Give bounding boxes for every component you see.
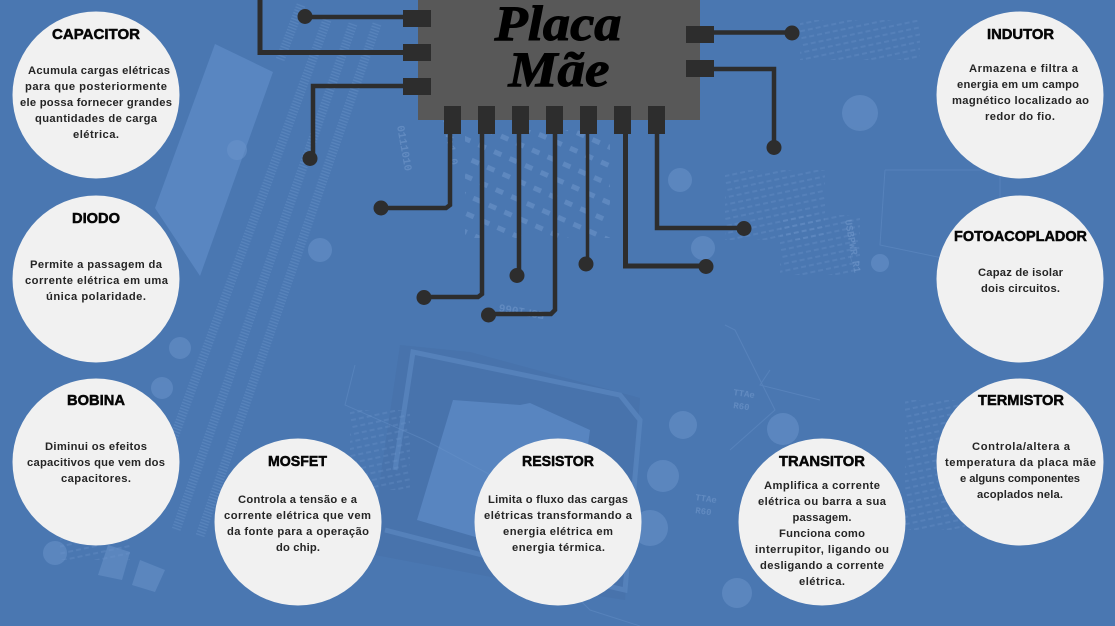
panel: resistor: energia térmica.	[512, 542, 605, 554]
chip body	[418, 0, 700, 120]
panel: transitor: desligando a corrente	[760, 560, 884, 572]
panel: indutor	[936, 12, 1104, 178]
panel: mosfet	[214, 438, 382, 606]
panel: bobina: BOBINA	[67, 392, 125, 409]
panel: termistor: temperatura da placa mãe	[945, 457, 1096, 469]
panel: indutor: redor do fio.	[985, 111, 1055, 123]
background: motherboard photo: R60	[695, 506, 712, 518]
panel: transitor: Amplifica a corrente	[764, 480, 880, 492]
panel: diodo: única polaridade.	[46, 291, 146, 303]
panel: transitor: TRANSITOR	[779, 453, 865, 470]
panel: mosfet: da fonte para a operação	[227, 526, 369, 538]
panel: capacitor: elétrica.	[73, 129, 119, 141]
panel: fotoacoplador	[936, 196, 1104, 362]
panel: transitor: Funciona como	[779, 528, 865, 540]
panel: capacitor: quantidades de carga	[35, 113, 158, 125]
background: motherboard photo: TTAe	[695, 493, 717, 506]
panel: capacitor: para que posteriormente	[25, 81, 167, 93]
panel: mosfet: MOSFET	[268, 453, 327, 470]
panel: resistor	[474, 438, 642, 606]
panel: bobina: capacitivos que vem dos	[27, 457, 165, 469]
panel: mosfet: do chip.	[276, 542, 320, 554]
panel: resistor: elétricas transformando a	[484, 510, 633, 522]
panel: mosfet: corrente elétrica que vem	[224, 510, 371, 522]
panel: termistor: Controla/altera a	[972, 441, 1071, 453]
panel: bobina: Diminui os efeitos	[45, 441, 147, 453]
title	[493, 0, 622, 97]
panel: capacitor: Acumula cargas elétricas	[28, 65, 170, 77]
panel: transitor: elétrica ou barra a sua	[758, 496, 887, 508]
panel: resistor: RESISTOR	[522, 453, 594, 470]
background: motherboard photo: ESP1066	[498, 300, 546, 320]
panel: diodo: corrente elétrica em uma	[25, 275, 169, 287]
panel: mosfet: Controla a tensão e a	[238, 494, 358, 506]
panel: indutor: energia em um campo	[957, 79, 1079, 91]
panel: indutor: magnético localizado ao	[952, 95, 1089, 107]
panel: termistor: TERMISTOR	[978, 392, 1064, 409]
panel: transitor: interrupitor, ligando ou	[755, 544, 889, 556]
panel: fotoacoplador: FOTOACOPLADOR	[954, 228, 1087, 245]
trace end dots	[298, 9, 800, 322]
panel: fotoacoplador: dois circuitos.	[981, 283, 1060, 295]
panel: resistor: energia elétrica em	[503, 526, 613, 538]
panel: indutor: Armazena e filtra a	[969, 63, 1079, 75]
background: motherboard photo: 0111010	[393, 125, 413, 172]
panel: transitor: elétrica.	[799, 576, 845, 588]
circuit traces	[260, 0, 790, 314]
background: motherboard photo: REV:1.0	[439, 119, 459, 166]
panel: transitor: passagem.	[792, 512, 852, 524]
title: Mãe	[507, 41, 610, 97]
background: motherboard photo: R60	[733, 401, 750, 413]
panel: termistor: e alguns componentes	[960, 473, 1080, 485]
background: motherboard photo: USBPWR_R1	[841, 219, 861, 274]
panel: diodo: Permite a passagem da	[30, 259, 163, 271]
panel: capacitor	[12, 12, 180, 178]
panel: indutor: INDUTOR	[987, 26, 1054, 43]
panel: transitor	[738, 438, 906, 606]
panel: bobina	[12, 378, 180, 546]
panel: bobina: capacitores.	[61, 473, 131, 485]
panel: diodo: DIODO	[72, 210, 120, 227]
panel: diodo	[12, 196, 180, 362]
panel: capacitor: ele possa fornecer grandes	[20, 97, 172, 109]
background: motherboard photo: TTAe	[733, 388, 755, 401]
panel: capacitor: CAPACITOR	[52, 26, 140, 43]
panel: termistor	[936, 378, 1104, 546]
panel: fotoacoplador: Capaz de isolar	[978, 267, 1064, 279]
panel: termistor: acoplados nela.	[977, 489, 1063, 501]
panel: resistor: Limita o fluxo das cargas	[488, 494, 628, 506]
chip pins	[403, 10, 714, 134]
